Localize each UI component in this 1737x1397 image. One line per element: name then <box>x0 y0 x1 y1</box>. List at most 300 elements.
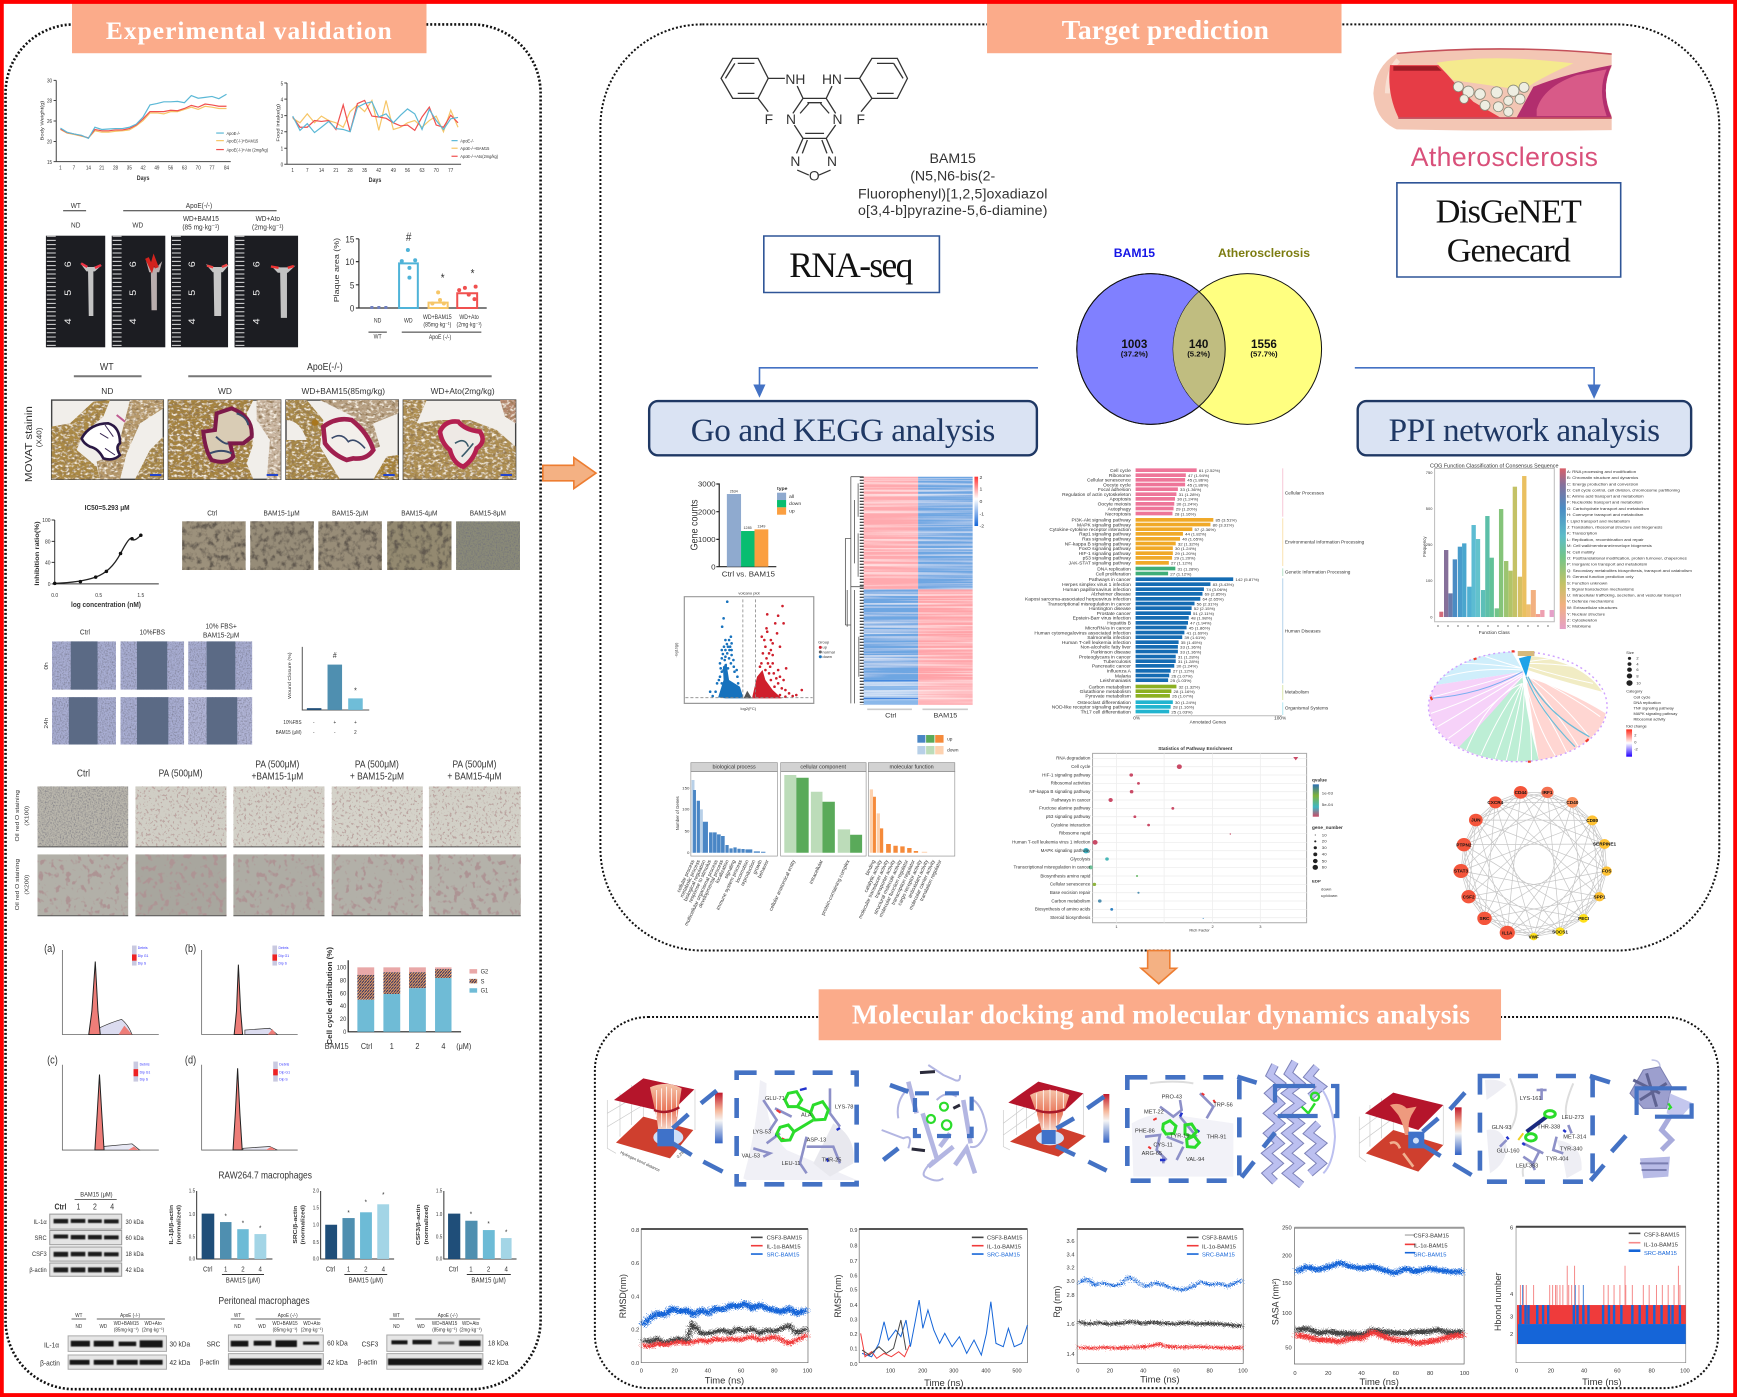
energy landscape 3 <box>1359 1093 1472 1175</box>
bubble chart: pathway enrichment: 50 <box>1322 859 1327 863</box>
bar chart: wound closure: Wound Closure (%) <box>287 652 293 699</box>
label box: RNA-seq: RNA-seq <box>789 245 914 285</box>
peritoneal macrophages western blots: CSF3 <box>362 1341 378 1349</box>
cell micrographs: BAM15 dose: BAM15-8μM <box>470 510 506 518</box>
bubble chart: pathway enrichment: RNA degradation <box>1056 756 1091 761</box>
molecule: BAM15 structure: N <box>786 111 796 127</box>
bar chart: KEGG classification: 64 (2.65%) <box>1202 597 1224 602</box>
chart: food intake: 56 <box>405 168 410 174</box>
wound healing images: Ctrl <box>80 629 90 637</box>
chart: food intake <box>276 81 499 184</box>
bar chart: COG classification: 0 <box>1430 615 1432 619</box>
bar chart: KEGG classification: 33 (1.36%) <box>1180 645 1202 650</box>
aorta photographs: 6 <box>252 261 262 267</box>
RAW264.7 western blot: CSF3 <box>32 1250 47 1258</box>
PPI network: CSF2 <box>1463 895 1475 899</box>
protein structure 2 <box>1237 1062 1337 1185</box>
volcano plot: Group <box>818 640 829 644</box>
binding pocket 1: THR-25 <box>822 1158 841 1164</box>
bar chart: CSF3: BAM15 (μM) <box>471 1277 506 1285</box>
binding pocket 2: ARG-65 <box>1142 1151 1162 1157</box>
peritoneal macrophages western blots: 30 kDa <box>170 1341 190 1349</box>
aorta photographs: 5 <box>64 289 74 296</box>
bar chart: KEGG classification: JAK-STAT signaling pathway <box>1069 561 1132 566</box>
line chart: SASA: 250 <box>1282 1226 1292 1232</box>
heatmap <box>845 475 984 719</box>
MOVAT staining images: MOVAT stainin <box>24 406 35 482</box>
bar chart: SRC: Ctrl <box>326 1266 336 1274</box>
bar chart: gene counts: 2000 <box>698 508 716 516</box>
heatmap: -2 <box>980 524 984 529</box>
Oil red O staining images: Oil red O staining <box>15 789 21 841</box>
bar chart: COG classification: 750 <box>1426 471 1432 475</box>
chord diagram: -2 <box>1634 748 1638 752</box>
bar chart: SRC: 1 <box>347 1266 351 1274</box>
binding pocket 2: TRP-56 <box>1213 1103 1233 1109</box>
bar chart: COG classification: T: Signal transduction mechanisms <box>1567 587 1634 591</box>
heatmap: -1 <box>980 512 984 517</box>
bar chart: KEGG classification: 31 (1.28%) <box>1178 567 1199 571</box>
bar chart: CSF3 <box>416 1188 517 1285</box>
chart: body weight: 1 <box>59 165 62 172</box>
bar chart: GO enrichment: cargo receptor activity <box>897 859 924 907</box>
RAW264.7 western blot: SRC <box>35 1234 47 1242</box>
bar chart: COG classification: C: Energy production and conversion <box>1567 482 1639 486</box>
stacked bar chart: cell cycle: 20 <box>340 1016 347 1023</box>
chart: body weight: 7 <box>73 165 75 172</box>
line chart: RMSD: 0.0 <box>631 1361 639 1367</box>
bubble chart: pathway enrichment: 10 <box>1322 833 1327 837</box>
bar chart: KEGG classification: 0% <box>1133 716 1140 720</box>
flow cytometry histograms: Dip G1 <box>138 954 148 958</box>
arrow: experimental to target prediction <box>543 458 596 489</box>
line chart: SASA: 100 <box>1282 1311 1292 1317</box>
bar chart: KEGG classification: Organismal Systems <box>1285 706 1329 710</box>
bar chart: KEGG classification: Cytokine-cytokine receptor interaction <box>1049 527 1131 532</box>
bar chart: COG classification: Q: Secondary metabolites biosynthesis, transport and catabolism <box>1567 568 1692 573</box>
binding pocket 2 <box>1127 1077 1239 1181</box>
bar chart: COG classification: A: RNA processing and modification <box>1567 469 1637 474</box>
line chart: Rg: 40 <box>1140 1369 1146 1375</box>
bar chart: COG classification: V: Defense mechanisms <box>1567 599 1614 604</box>
icon: atherosclerotic artery <box>1373 49 1613 131</box>
bar chart: GO enrichment: binding <box>865 859 877 876</box>
bar chart: SRC: 0.5 <box>313 1240 319 1246</box>
venn diagram: BAM15 <box>1114 246 1155 260</box>
bar chart: gene counts: Gene counts <box>688 499 699 551</box>
chart: IC50 curve <box>34 505 159 609</box>
bar chart: KEGG classification: 33 (1.36%) <box>1180 487 1202 492</box>
bubble chart: pathway enrichment: p53 signaling pathway <box>1046 814 1091 819</box>
bar chart: KEGG classification: Alzheimer disease <box>1091 592 1131 597</box>
line chart: SASA: SASA (nm²) <box>1270 1278 1280 1325</box>
label: atherosclerosis: Atherosclerosis <box>1411 142 1598 172</box>
peritoneal macrophages western blots: Peritoneal macrophages <box>218 1295 310 1306</box>
bubble chart: pathway enrichment: up/down <box>1321 893 1338 898</box>
line chart: RMSF: 300 <box>949 1369 958 1375</box>
RAW264.7 western blot: IL-1α <box>33 1218 47 1226</box>
bubble chart: pathway enrichment: qvalue <box>1312 778 1327 782</box>
bar chart: wound closure: - <box>313 731 315 736</box>
peritoneal macrophages western blots: WD+Ato <box>462 1320 479 1327</box>
aorta photographs: 5 <box>188 289 198 296</box>
RAW264.7 western blot: 42 kDa <box>126 1266 144 1274</box>
binding pocket 2: PHE-86 <box>1135 1128 1155 1134</box>
MOVAT staining images <box>24 361 516 482</box>
chart: hydrogen bond number: 20 <box>1548 1369 1554 1375</box>
cell micrographs: BAM15 dose: BAM15-2μM <box>332 510 368 518</box>
bar chart: KEGG classification: HIF-1 signaling pathway <box>1079 551 1132 556</box>
peritoneal macrophages western blots: (85mg·kg⁻¹) <box>114 1327 139 1334</box>
bar chart: COG classification: J: Translation, ribosomal structure and biogenesis <box>1567 525 1662 530</box>
stacked bar chart: cell cycle: G1 <box>481 987 489 995</box>
bar chart: IL-1 beta: 1.0 <box>189 1212 195 1218</box>
stacked bar chart: cell cycle: BAM15 <box>325 1042 349 1051</box>
bubble chart: pathway enrichment: gene_number <box>1312 825 1343 830</box>
bar chart: KEGG classification: 80 (3.31%) <box>1213 523 1234 527</box>
bar chart: COG classification: K: Transcription <box>1567 531 1598 536</box>
chart: food intake: Days <box>369 178 381 184</box>
peritoneal macrophages western blots: ApoE (-/-) <box>120 1313 140 1319</box>
chart: body weight: 30 <box>47 78 52 85</box>
bar chart: KEGG classification: 31 (1.28%) <box>1178 655 1200 659</box>
bubble chart: pathway enrichment: Steroid biosynthesis <box>1050 915 1090 920</box>
chart: body weight: 63 <box>182 165 187 172</box>
line chart: Rg <box>1052 1229 1248 1385</box>
flow cytometry histograms: Dip S <box>279 961 287 966</box>
stacked bar chart: cell cycle: 4 <box>441 1042 446 1051</box>
bar chart: KEGG classification: 27 (1.12%) <box>1170 572 1192 576</box>
bar chart: KEGG classification: 27 (1.12%) <box>1171 561 1193 566</box>
chord diagram: 0 <box>1634 740 1636 744</box>
chart: IC50 curve: 0.5 <box>95 593 102 599</box>
aorta photographs: 5 <box>252 289 262 296</box>
cell micrographs: BAM15 dose <box>182 510 520 570</box>
bar chart: KEGG classification: Cellular senescence <box>1087 478 1131 483</box>
bar chart: SRC: 2.0 <box>313 1188 319 1195</box>
peritoneal macrophages western blots: WD+Ato <box>303 1320 321 1327</box>
bar chart: GO enrichment: translation regulator <box>919 859 944 902</box>
aorta photographs: WD+BAM15 <box>183 216 219 223</box>
bar chart: COG classification: R: General function prediction only <box>1567 574 1634 579</box>
bar chart: KEGG classification: Genetic Information Processing <box>1285 570 1351 574</box>
bar chart: wound closure <box>276 647 369 736</box>
flow cytometry histograms: Dip S <box>138 961 147 966</box>
line chart: SASA: 60 <box>1393 1371 1399 1377</box>
RAW264.7 western blot: 60 kDa <box>126 1234 144 1242</box>
panel: target prediction <box>600 3 1719 951</box>
line chart: Rg: 60 <box>1173 1369 1180 1375</box>
peritoneal macrophages western blots: WD+BAM15 <box>432 1320 457 1327</box>
bubble chart: pathway enrichment: Glycolysis <box>1070 857 1090 861</box>
chart: body weight: 26 <box>47 119 52 125</box>
molecule: BAM15 structure: HN <box>822 71 842 87</box>
line chart: RMSF: 0.4 <box>850 1303 857 1309</box>
bar chart: CSF3: 1.5 <box>436 1188 443 1195</box>
stacked bar chart: cell cycle: S <box>481 978 484 985</box>
line chart: RMSD: 20 <box>671 1369 678 1375</box>
bar chart: COG classification: N: Cell motility <box>1567 550 1596 554</box>
chart: hydrogen bond number: IL-1α-BAM15 <box>1644 1242 1678 1248</box>
bubble chart: pathway enrichment: Fructose alanine pathway <box>1039 806 1091 811</box>
bar chart: GO enrichment: immune system process <box>715 859 744 911</box>
bar chart: gene counts: 0 <box>711 563 716 571</box>
bar chart: IL-1 beta: 1 <box>224 1266 228 1274</box>
bubble chart: pathway enrichment: Statistics of Pathway Enrichment <box>1158 746 1233 751</box>
chart: food intake: 7 <box>306 168 309 174</box>
bubble chart: pathway enrichment: HIF-1 signaling pathway <box>1042 773 1091 777</box>
bar chart: wound closure: 10%FBS <box>283 720 302 726</box>
chart: food intake: 5 <box>281 81 283 87</box>
bar chart: IL-1 beta: * <box>225 1213 227 1221</box>
peritoneal macrophages western blots: 60 kDa <box>327 1340 348 1348</box>
chart: food intake: ApoE-/-+Ato(2mg/kg) <box>460 154 499 159</box>
PPI network: VWF <box>1528 935 1539 939</box>
bar chart: plaque area: (2mg·kg⁻¹) <box>457 322 482 329</box>
peritoneal macrophages western blots: β-actin <box>358 1359 377 1366</box>
chart: IC50 curve: 0.0 <box>51 593 58 599</box>
text block: BAM15 chemical name <box>858 151 1047 219</box>
line chart: SASA: CSF3-BAM15 <box>1414 1233 1449 1239</box>
bar chart: KEGG classification: Herpes simplex virus 1 infection <box>1062 582 1131 587</box>
stacked bar chart: cell cycle: 1 <box>390 1042 394 1051</box>
line chart: SASA: Time (ns) <box>1359 1376 1399 1387</box>
line chart: RMSF: 0.7 <box>850 1259 857 1265</box>
bar chart: KEGG classification: 30 (1.24%) <box>1176 664 1198 669</box>
bar chart: IL-1 beta <box>168 1188 272 1285</box>
binding pocket 3: LEU-273 <box>1562 1115 1584 1121</box>
bubble chart: pathway enrichment: Base excision repair <box>1050 890 1091 895</box>
aorta photographs: 4 <box>188 318 198 324</box>
RAW264.7 western blot: 18 kDa <box>126 1250 144 1258</box>
bar chart: SRC: SRC/β-actin <box>292 1206 299 1244</box>
chart: IC50 curve: IC50=5.293 μM <box>85 505 130 512</box>
bar chart: COG classification: Y: Nuclear structure <box>1567 612 1606 616</box>
chart: food intake: 70 <box>434 168 439 174</box>
bar chart: KEGG classification: p53 signaling pathway <box>1083 556 1132 561</box>
bar chart: plaque area: (85mg·kg⁻¹) <box>423 322 451 329</box>
bar chart: KEGG classification <box>1025 468 1365 724</box>
bar chart: KEGG classification: Oocyte meiosis <box>1098 502 1132 507</box>
Oil red O staining images: Ctrl <box>77 768 90 779</box>
bar chart: GO enrichment: up <box>947 737 953 742</box>
aorta photographs: 4 <box>128 318 139 324</box>
bar chart: COG classification: L: Replication, recombination and repair <box>1567 537 1644 542</box>
bar chart: wound closure: - <box>334 731 336 736</box>
bar chart: KEGG classification: Tuberculosis <box>1103 659 1132 664</box>
bar chart: GO enrichment: 100 <box>682 807 690 812</box>
venn diagram <box>1077 246 1322 424</box>
bar chart: GO enrichment: down <box>947 748 959 753</box>
bar chart: SRC: 0.0 <box>313 1256 319 1263</box>
bar chart: KEGG classification: 48 (1.98%) <box>1191 616 1213 621</box>
line chart: RMSD: 40 <box>705 1369 711 1375</box>
heatmap: BAM15 <box>933 713 957 719</box>
RAW264.7 western blot <box>29 1170 312 1276</box>
bar chart: IL-1 beta: 0.5 <box>189 1234 195 1241</box>
bar chart: IL-1 beta: * <box>259 1225 262 1233</box>
bar chart: KEGG classification: Salmonella infection <box>1087 635 1131 640</box>
bar chart: GO enrichment: biological process <box>713 765 756 771</box>
peritoneal macrophages western blots: (2mg·kg⁻¹) <box>142 1327 165 1334</box>
arrow: venn to PPI <box>1355 368 1601 399</box>
stacked bar chart: cell cycle: Cell cycle distribution (%) <box>326 946 334 1045</box>
text block: BAM15 chemical name: BAM15 <box>929 151 976 167</box>
bar chart: KEGG classification: Focal adhesion <box>1098 487 1131 492</box>
bar chart: KEGG classification: Influenza A <box>1107 669 1132 674</box>
bar chart: COG classification: Function Class <box>1479 630 1511 635</box>
chart: body weight <box>40 78 269 182</box>
line chart: SASA: 200 <box>1282 1253 1292 1259</box>
bar chart: wound closure: + <box>354 721 357 726</box>
aorta photographs <box>46 203 298 347</box>
RAW264.7 western blot: 1 <box>77 1202 80 1212</box>
volcano plot <box>674 592 835 711</box>
bar chart: KEGG classification: MicroRNAs in cancer <box>1085 626 1131 630</box>
bar chart: SRC: 1.5 <box>313 1205 319 1212</box>
bar chart: KEGG classification: 25 (1.03%) <box>1171 710 1193 714</box>
wound healing images: BAM15-2μM <box>203 632 239 640</box>
line chart: RMSD: Time (ns) <box>705 1375 744 1386</box>
binding pocket 2: TYR-19 <box>1170 1133 1189 1139</box>
bar chart: COG classification: 100 <box>1426 579 1432 583</box>
Oil red O staining images: Oil red O staining <box>15 858 21 910</box>
bar chart: KEGG classification: Ras signaling pathway <box>1082 537 1132 542</box>
bar chart: KEGG classification: 61 (2.52%) <box>1199 468 1221 473</box>
bar chart: CSF3: 4 <box>505 1266 508 1274</box>
bubble chart: pathway enrichment: Ribosome rapid <box>1059 831 1091 836</box>
line chart: RMSF: 400 <box>981 1369 991 1375</box>
bar chart: COG classification: O: Posttranslational modification, protein turnover, chaperones <box>1567 556 1687 560</box>
line chart: RMSD: RMSD(nm) <box>618 1274 628 1318</box>
chord diagram: MAPK signaling pathway <box>1633 712 1677 716</box>
chart: body weight: ApoE(-/-)+Ato (2mg/kg) <box>227 147 269 152</box>
bar chart: KEGG classification: Annotated Genes <box>1190 720 1227 724</box>
chart: hydrogen bond number <box>1493 1226 1690 1387</box>
binding pocket 1: LEU-11 <box>782 1161 800 1167</box>
chart: food intake: 35 <box>362 168 367 174</box>
MOVAT staining images: WT <box>100 361 114 373</box>
bar chart: KEGG classification: 100% <box>1274 716 1286 720</box>
venn diagram: 1556 <box>1251 338 1277 351</box>
protein structure 1 <box>882 1065 987 1180</box>
bar chart: KEGG classification: 29 (1.20%) <box>1174 556 1196 561</box>
bubble chart: pathway enrichment: Pathways in cancer <box>1051 798 1091 802</box>
binding pocket 2: MET-22 <box>1144 1109 1164 1115</box>
peritoneal macrophages western blots: β-actin <box>40 1360 60 1368</box>
binding pocket 1: LYS-78 <box>835 1104 853 1110</box>
bubble chart: pathway enrichment: Cytokine interaction <box>1051 823 1091 827</box>
bar chart: KEGG classification: 45 (1.86%) <box>1187 478 1209 483</box>
bar chart: GO enrichment: catalytic activity <box>863 859 884 894</box>
aorta photographs: WD <box>132 222 143 230</box>
chart: hydrogen bond number: CSF3-BAM15 <box>1644 1232 1679 1238</box>
bar chart: CSF3: (normalized) <box>423 1205 430 1245</box>
line chart: RMSD: 0 <box>640 1369 643 1375</box>
line chart: SASA: 150 <box>1282 1281 1292 1287</box>
peritoneal macrophages western blots: ND <box>234 1324 241 1330</box>
arrow: target prediction to docking <box>1141 951 1176 984</box>
line chart: RMSD: CSF3-BAM15 <box>767 1236 802 1242</box>
bar chart: GO enrichment: 0 <box>687 850 690 855</box>
PPI network: SPP1 <box>1593 895 1606 899</box>
venn diagram: 1003 <box>1121 338 1148 351</box>
RAW264.7 western blot: RAW264.7 macrophages <box>218 1170 312 1181</box>
PPI network: CD40 <box>1566 800 1579 805</box>
chord diagram: TNF signaling pathway <box>1633 706 1674 710</box>
bar chart: KEGG classification: 33 (1.36%) <box>1180 650 1202 654</box>
label box: DisGeNET Genecard: Genecard <box>1447 231 1571 269</box>
bar chart: KEGG classification: 45 (1.86%) <box>1187 483 1209 487</box>
protein structure 3 <box>1590 1060 1693 1181</box>
bar chart: plaque area: WD <box>404 318 413 324</box>
binding pocket 2: CYS-11 <box>1153 1143 1173 1149</box>
bar chart: GO enrichment: biological regulation <box>683 859 708 902</box>
line chart: RMSD: 100 <box>803 1369 812 1375</box>
flow cytometry histograms: Debris <box>140 1062 150 1067</box>
RAW264.7 western blot: Ctrl <box>55 1202 66 1212</box>
flow cytometry histograms: (a) <box>44 943 55 955</box>
chord diagram: DNA replication <box>1633 701 1661 705</box>
bar chart: GO enrichment: signaling <box>723 859 737 880</box>
energy landscape 1 <box>607 1078 723 1173</box>
line chart: RMSD: 0.4 <box>631 1294 640 1300</box>
line chart: RMSF: Time (ns) <box>924 1377 964 1388</box>
chart: IC50 curve: log concentration (nM) <box>71 602 141 609</box>
bar chart: KEGG classification: NOD-like receptor signaling pathway <box>1052 705 1132 710</box>
bar chart: KEGG classification: Human cytomegalovirus associated infection <box>1034 631 1131 635</box>
line chart: SASA: SRC-BAM15 <box>1414 1252 1446 1258</box>
volcano plot: volcano plot <box>738 592 761 596</box>
line chart: SASA: 100 <box>1460 1371 1469 1377</box>
RAW264.7 western blot: 4 <box>110 1202 114 1212</box>
bar chart: gene counts: 1000 <box>698 535 716 544</box>
bar chart: KEGG classification: Regulation of actin cytoskeleton <box>1062 492 1131 497</box>
label box: DisGeNET Genecard <box>1397 183 1621 277</box>
line chart: RMSF: 0.1 <box>850 1346 857 1352</box>
bar chart: plaque area: WT <box>374 334 382 341</box>
chart: food intake: 49 <box>391 168 396 174</box>
chord diagram: 8 <box>1636 674 1639 678</box>
docking set 1: CSF3 <box>607 1065 987 1184</box>
chart: hydrogen bond number: 100 <box>1680 1369 1690 1375</box>
binding pocket 2: VAL-94 <box>1186 1157 1204 1163</box>
PPI network <box>1453 786 1617 940</box>
bar chart: KEGG classification: Pathways in cancer <box>1089 577 1131 582</box>
flow cytometry histograms: Dip G1 <box>140 1070 150 1075</box>
bar chart: KEGG classification: Human papillomavirus infection <box>1063 587 1131 592</box>
chart: hydrogen bond number: 4 <box>1510 1292 1514 1298</box>
chart: hydrogen bond number: 0 <box>1515 1369 1518 1375</box>
bar chart: wound closure: * <box>354 686 357 696</box>
aorta photographs: ND <box>71 222 80 230</box>
bar chart: COG classification: Z: Cytoskeleton <box>1567 618 1598 622</box>
chart: body weight: 21 <box>99 165 105 172</box>
bar chart: gene counts: 1349 <box>757 525 765 529</box>
bar chart: plaque area: 5 <box>350 280 354 291</box>
chart: body weight: 84 <box>224 165 229 172</box>
chord diagram: 2 <box>1634 734 1636 738</box>
bar chart: GO enrichment: structural molecule activity <box>873 859 904 916</box>
heading: target prediction: Target prediction <box>1062 14 1269 45</box>
flow cytometry histograms: Debris <box>279 946 289 950</box>
PPI network: PTPN2 <box>1456 843 1472 847</box>
peritoneal macrophages western blots: (85mg·kg⁻¹) <box>432 1327 457 1334</box>
bar chart: KEGG classification: 31 (1.28%) <box>1179 492 1200 497</box>
peritoneal macrophages western blots: WT <box>234 1313 241 1319</box>
bar chart: KEGG classification: Osteoclast differentiation <box>1077 700 1131 705</box>
bar chart: KEGG classification: Non-alcoholic fatty liver <box>1080 645 1131 650</box>
